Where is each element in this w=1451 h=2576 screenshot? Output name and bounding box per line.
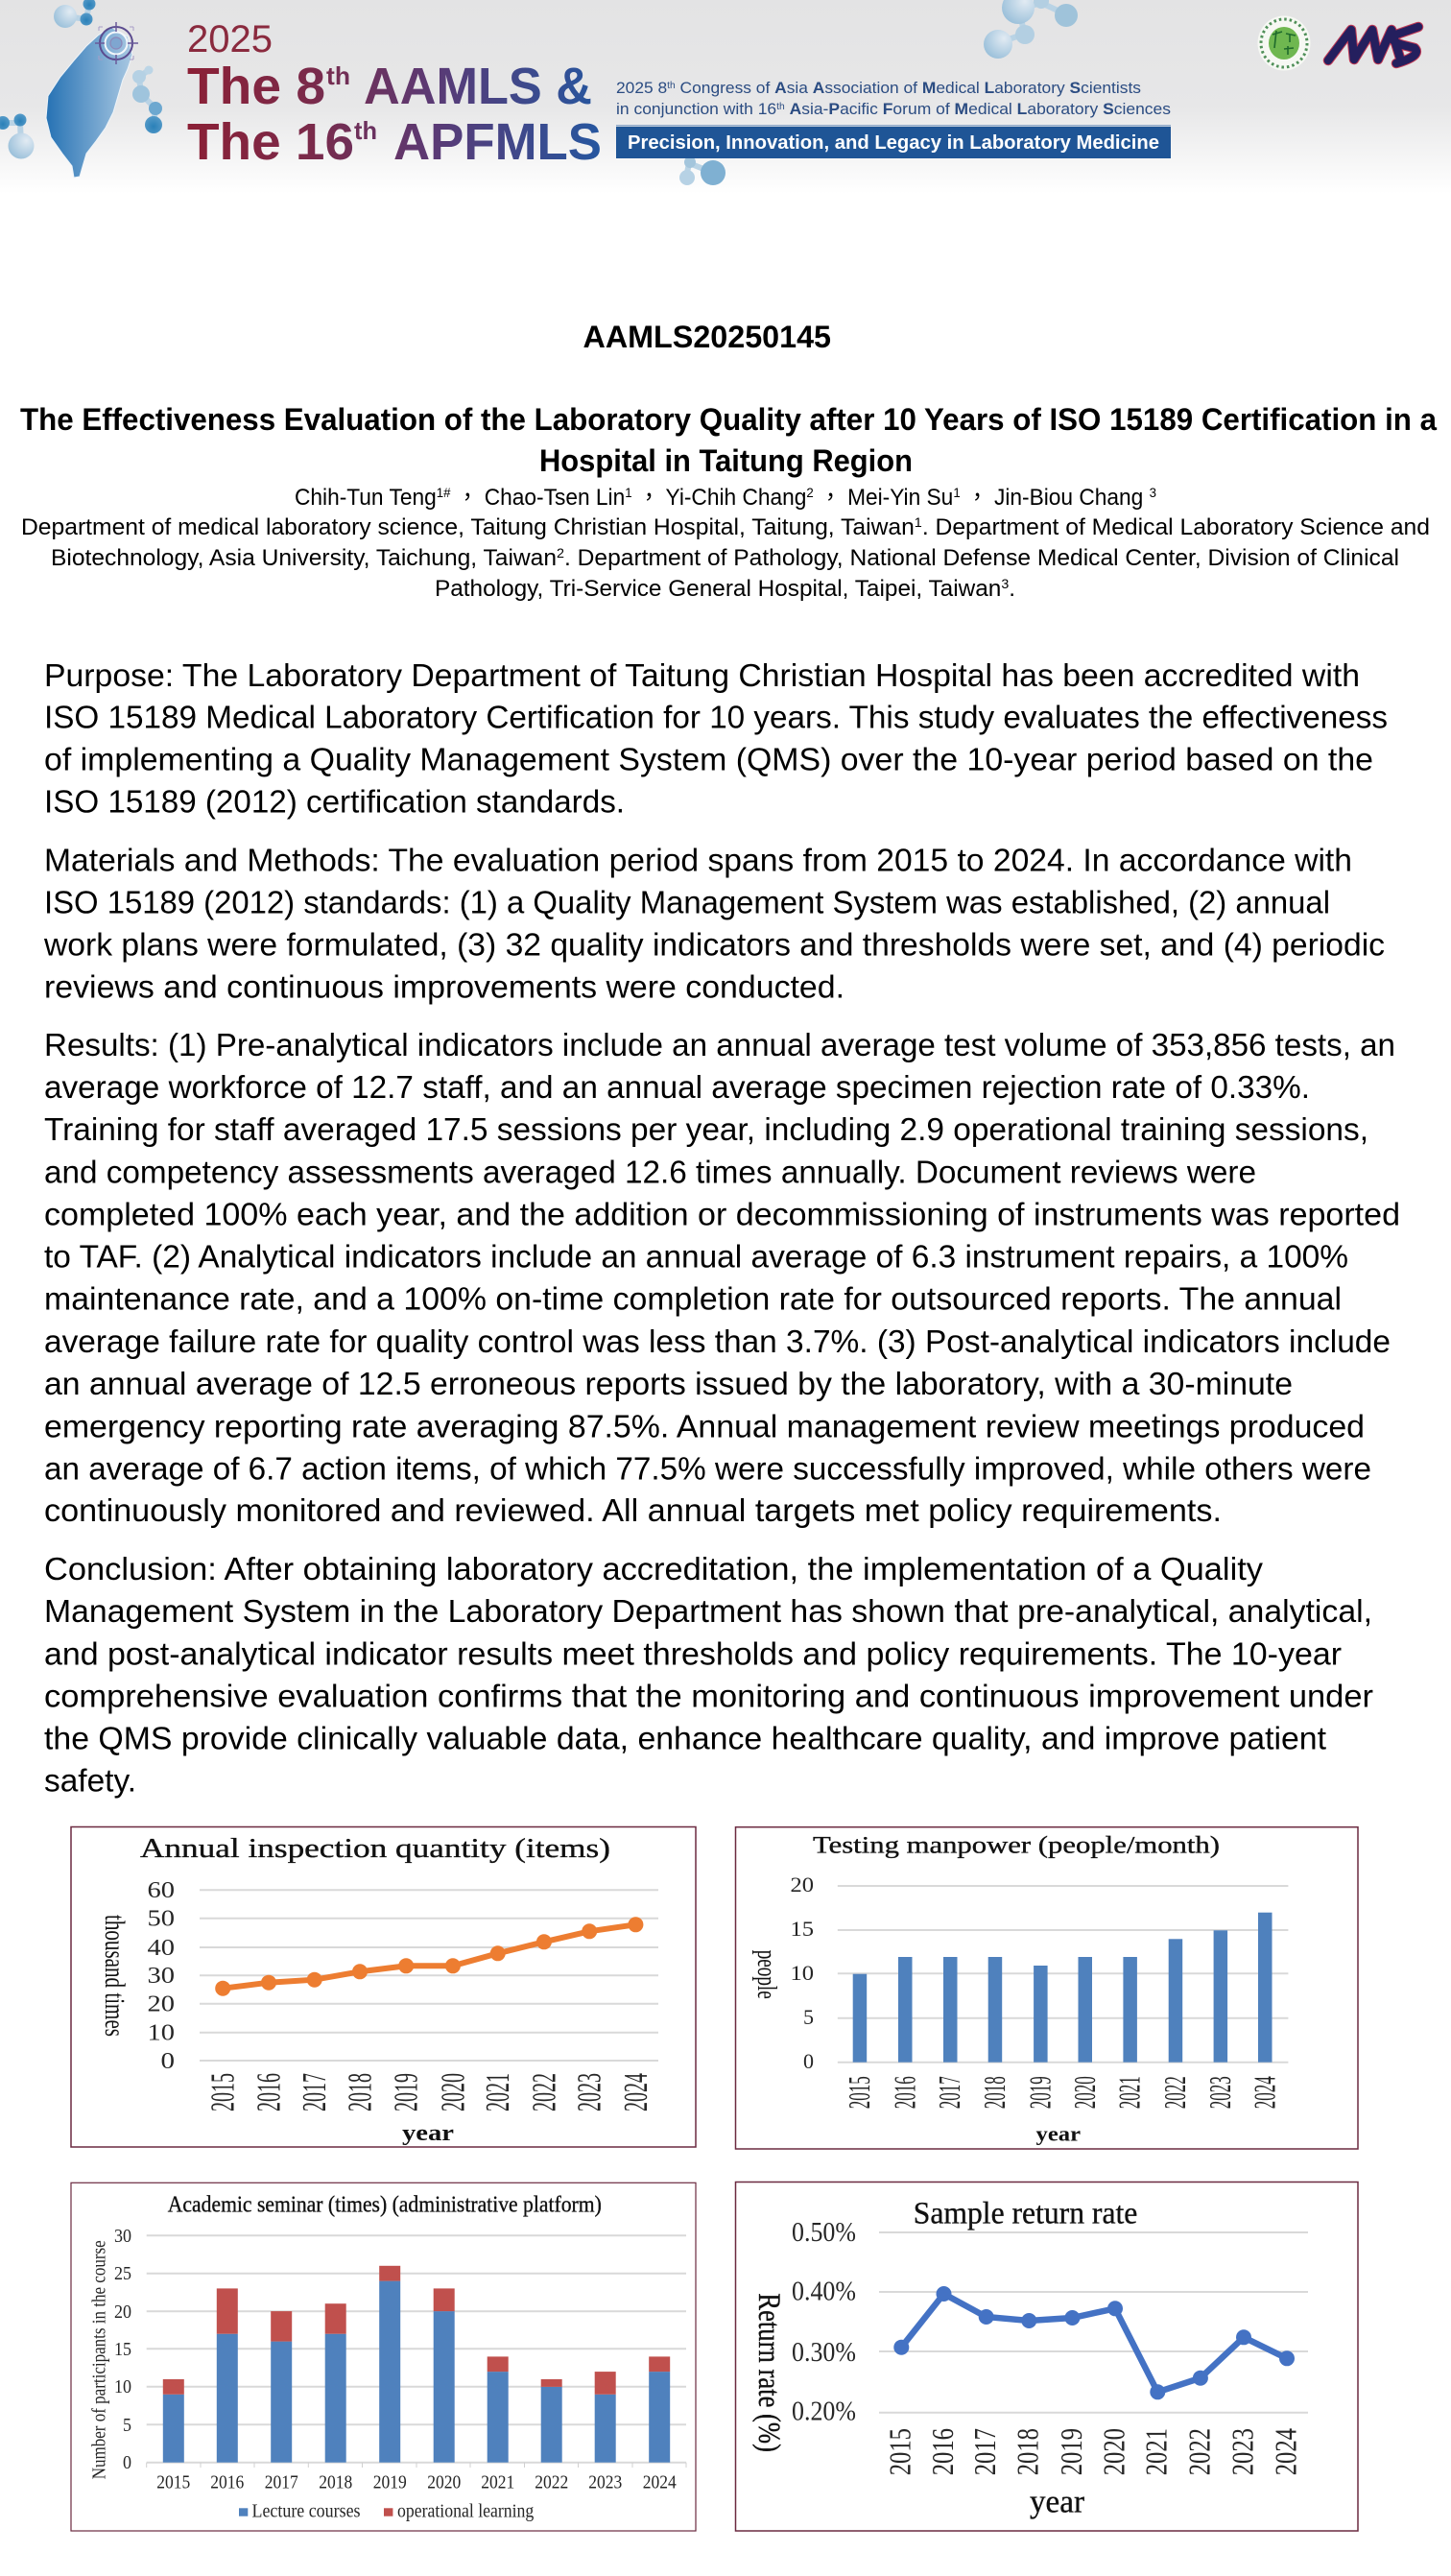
y axis labels: 0 (803, 2049, 814, 2073)
x axis labels (842, 2076, 1281, 2109)
header banner (0, 0, 1451, 194)
x axis labels: 2023 (588, 2472, 622, 2493)
x axis labels: 2018 (1011, 2428, 1045, 2475)
x axis labels: 2020 (434, 2073, 471, 2111)
congress line 2: in conjunction with 16 (616, 100, 773, 118)
x axis labels: 2019 (388, 2073, 425, 2111)
x axis labels: 2023 (1202, 2076, 1237, 2109)
text block: results: average failure rate for quality control was less than 3.7%. (3) Post-analytical indicators include (44, 1324, 1391, 1359)
chart title: Annual inspection quantity (items) (140, 1833, 610, 1864)
x axis title: year (402, 2121, 454, 2146)
authors: ， Mei-Yin Su (814, 485, 953, 511)
text block: conclusion (44, 1551, 1373, 1799)
legend (239, 2501, 534, 2522)
text block: conclusion: Management System in the Laboratory Department has shown that pre-analytical, analytical, (44, 1593, 1372, 1629)
slogan bar (616, 125, 1171, 158)
x axis labels: 2021 (1112, 2076, 1147, 2109)
y axis labels (114, 2226, 131, 2473)
text block: conclusion: safety. (44, 1762, 136, 1799)
text block: conclusion: Conclusion: After obtaining laboratory accreditation, the implementation of a Quality (44, 1551, 1264, 1586)
y axis labels: 0.20% (792, 2397, 856, 2427)
y axis labels: 40 (148, 1936, 175, 1961)
x axis labels: 2022 (525, 2073, 562, 2111)
congress line 2: th (776, 102, 785, 112)
authors: ， Yi-Chih Chang (632, 485, 806, 511)
y axis labels (148, 1878, 175, 2074)
text block: purpose: Purpose: The Laboratory Department of Taitung Christian Hospital has been accredited with (44, 657, 1360, 693)
congress line 2: Asia-Pacific Forum of Medical Laboratory Sciences (790, 100, 1169, 118)
text block: results: emergency reporting rate averaging 87.5%. Annual management review meetings produced (44, 1409, 1365, 1443)
y axis labels: 0.40% (792, 2277, 856, 2307)
y axis labels: 0 (123, 2452, 131, 2473)
x axis labels: 2021 (1139, 2428, 1174, 2475)
heading: The 8th AAMLS &: AAMLS & (364, 58, 592, 115)
icon: molecules (0, 0, 1078, 185)
text block: results: continuously monitored and reviewed. All annual targets met policy requirements. (44, 1492, 1222, 1528)
text block: results: an annual average of 12.5 erroneous reports issued by the laboratory, with a 30-minute (44, 1366, 1293, 1401)
x axis labels: 2019 (1022, 2076, 1057, 2109)
y axis labels: 10 (791, 1961, 814, 1985)
authors: 3 (1150, 485, 1156, 500)
heading: The 16th APFMLS: APFMLS (393, 113, 602, 171)
x axis labels: 2021 (481, 2472, 514, 2493)
x axis labels: 2020 (1096, 2428, 1130, 2475)
y axis labels: 30 (114, 2226, 131, 2247)
text block: results: maintenance rate, and a 100% on-time completion rate for outsourced reports. The annual (44, 1280, 1342, 1317)
text block: results: Results: (1) Pre-analytical indicators include an annual average test volume of 353,856 tests, an (44, 1027, 1395, 1062)
x axis labels: 2017 (296, 2073, 333, 2111)
x axis labels: 2022 (1181, 2428, 1216, 2475)
y axis title: thousand times (99, 1915, 131, 2037)
authors: ， Jin-Biou Chang (961, 485, 1150, 511)
x axis labels: 2022 (535, 2472, 568, 2493)
x axis labels: 2019 (1054, 2428, 1088, 2475)
panel: testing manpower bar chart (735, 1827, 1358, 2149)
affiliations: Department of medical laboratory science, Taitung Christian Hospital, Taitung, Taiwan (21, 514, 891, 540)
y axis labels: 30 (148, 1964, 175, 1989)
text block: materials and methods: Materials and Methods: The evaluation period spans from 2015 to 2024. In accordance with (44, 843, 1352, 877)
slogan bar: Precision, Innovation, and Legacy in Laboratory Medicine (628, 132, 1159, 154)
text block: purpose: ISO 15189 (2012) certification standards. (44, 783, 625, 820)
x axis labels (883, 2428, 1302, 2475)
y axis labels: 20 (791, 1872, 814, 1896)
bars (853, 1913, 1273, 2063)
x axis labels: 2024 (617, 2073, 654, 2111)
x axis labels: 2017 (265, 2472, 298, 2493)
x axis labels: 2021 (479, 2073, 516, 2111)
x axis labels: 2016 (887, 2076, 921, 2109)
y axis labels: 20 (114, 2302, 131, 2323)
congress line 1: Asia Association of Medical Laboratory Scientists (774, 79, 1140, 97)
authors: ， Chao-Tsen Lin (450, 485, 625, 511)
authors: 1 (625, 485, 632, 500)
icon: target on Taipei (95, 22, 138, 64)
x axis labels: 2020 (427, 2472, 461, 2493)
x axis labels: 2015 (204, 2073, 242, 2111)
y axis labels: 20 (148, 1992, 175, 2017)
x axis labels: 2022 (1157, 2076, 1192, 2109)
text block: materials and methods: ISO 15189 (2012) standards: (1) a Quality Management System was established, (2) annual (44, 885, 1330, 919)
text block: materials and methods (43, 843, 1385, 1004)
x axis labels: 2023 (1225, 2428, 1259, 2475)
x axis title: year (1036, 2122, 1081, 2146)
affiliations: 2 (557, 545, 564, 561)
text block: materials and methods: reviews and continuous improvements were conducted. (44, 969, 844, 1004)
x axis labels: 2024 (1268, 2428, 1302, 2475)
y axis labels: 25 (114, 2263, 131, 2284)
affiliations: . (1009, 576, 1015, 602)
heading: The 8th AAMLS &: th (326, 61, 350, 90)
x axis labels: 2020 (1067, 2076, 1102, 2109)
legend: operational learning (397, 2501, 534, 2522)
x axis labels: 2015 (842, 2076, 876, 2109)
legend: Lecture courses (251, 2501, 361, 2522)
y axis labels: 10 (148, 2021, 175, 2046)
text block: conclusion: comprehensive evaluation confirms that the monitoring and continuous improvement under (44, 1678, 1373, 1714)
congress line 1: th (667, 81, 676, 91)
x axis labels: 2015 (156, 2472, 190, 2493)
affiliations: Pathology, Tri-Service General Hospital, Taipei, Taiwan (435, 576, 993, 602)
x axis labels (156, 2472, 677, 2493)
chart title: Sample return rate (914, 2197, 1137, 2231)
y axis labels: 50 (148, 1906, 175, 1931)
affiliations: Biotechnology, Asia University, Taichung, Taiwan (51, 545, 545, 571)
y axis labels (791, 1872, 814, 2073)
x axis labels: 2019 (373, 2472, 407, 2493)
abstract id: AAMLS20250145 (583, 320, 831, 354)
x axis labels: 2018 (342, 2073, 378, 2111)
text block: results: Training for staff averaged 17.5 sessions per year, including 2.9 operational training sessions, (44, 1111, 1368, 1147)
affiliations: 1 (915, 514, 922, 530)
x axis labels: 2017 (932, 2076, 966, 2109)
y axis labels: 0.50% (792, 2217, 856, 2248)
y axis labels: 5 (123, 2415, 131, 2436)
x axis labels: 2017 (967, 2428, 1002, 2475)
heading: The 8th AAMLS & (187, 58, 592, 115)
text block: conclusion: and post-analytical indicator results meet thresholds and policy requirements. The 10-year (44, 1635, 1342, 1672)
text block: results: completed 100% each year, and the addition or decommissioning of instruments was reported (44, 1196, 1400, 1232)
text block: purpose: of implementing a Quality Management System (QMS) over the 10-year period based on the (44, 741, 1373, 777)
text block: purpose (44, 657, 1388, 820)
x axis labels: 2016 (250, 2073, 288, 2111)
panel: annual inspection quantity line chart (71, 1827, 696, 2147)
paper title: Hospital in Taitung Region (539, 443, 913, 478)
y axis title: Number of participants in the course (89, 2240, 110, 2479)
x axis labels: 2023 (571, 2073, 608, 2111)
chart title: Testing manpower (people/month) (813, 1833, 1220, 1859)
icon: round society logo (1257, 15, 1311, 71)
y axis labels: 10 (114, 2376, 131, 2397)
affiliations: . Department of Medical Laboratory Science and (922, 514, 1430, 540)
icon: Taiwan map (46, 27, 132, 178)
x axis labels: 2016 (925, 2428, 960, 2475)
x axis labels: 2016 (210, 2472, 244, 2493)
x axis labels: 2024 (1247, 2076, 1281, 2109)
congress line 1: 2025 8 (616, 79, 666, 97)
y axis labels: 0 (161, 2049, 175, 2074)
panel: academic seminar stacked bar chart (71, 2182, 696, 2531)
y axis title: people (751, 1950, 781, 1999)
text block: results: an average of 6.7 action items, of which 77.5% were successfully improved, while others were (44, 1451, 1371, 1486)
text block: materials and methods: work plans were formulated, (3) 32 quality indicators and thresholds were set, and (4) periodic (43, 927, 1385, 962)
affiliations (21, 514, 1430, 602)
heading: The 16th APFMLS: The 16 (187, 113, 354, 171)
panel: sample return rate line chart (735, 2182, 1358, 2531)
x axis labels: 2015 (883, 2428, 917, 2475)
chart title: Academic seminar (times) (administrative platform) (168, 2192, 602, 2217)
heading: The 16th APFMLS (187, 113, 602, 171)
affiliations: 3 (1001, 576, 1009, 591)
text block: results: and competency assessments averaged 12.6 times annually. Document reviews were (44, 1154, 1256, 1190)
x axis labels: 2018 (319, 2472, 352, 2493)
x axis title: year (1030, 2484, 1085, 2519)
heading: The 8th AAMLS &: The 8 (187, 58, 325, 115)
paper title (20, 402, 1437, 478)
x axis labels: 2018 (977, 2076, 1011, 2109)
authors: 1 (953, 485, 961, 500)
y axis labels: 5 (803, 2005, 814, 2029)
y axis title: Return rate (%) (751, 2293, 786, 2452)
x axis labels (204, 2073, 654, 2111)
series: lecture courses (163, 2281, 670, 2463)
text block: conclusion: the QMS provide clinically valuable data, enhance healthcare quality, and improve patient (44, 1720, 1326, 1756)
text block: results (44, 1027, 1400, 1528)
y axis labels: 15 (791, 1917, 814, 1941)
line series (893, 2286, 1295, 2399)
icon: MMS logo (1328, 27, 1418, 63)
authors: 2 (806, 485, 814, 500)
y axis labels: 60 (148, 1878, 175, 1903)
y axis labels: 0.30% (792, 2337, 856, 2368)
line series (215, 1917, 643, 1996)
series: operational learning (163, 2266, 670, 2395)
y axis labels: 15 (114, 2339, 131, 2360)
year 2025: 2025 (187, 18, 273, 60)
y axis labels (792, 2217, 856, 2427)
text block: results: average workforce of 12.7 staff, and an annual average specimen rejection rate of 0.33%. (44, 1069, 1310, 1105)
paper title: The Effectiveness Evaluation of the Laboratory Quality after 10 Years of ISO 15189 Certification in a (20, 402, 1437, 437)
x axis labels: 2024 (643, 2472, 677, 2493)
text block: purpose: ISO 15189 Medical Laboratory Certification for 10 years. This study evaluates the effectiveness (44, 699, 1388, 735)
heading: The 16th APFMLS: th (354, 116, 377, 145)
affiliations: . Department of Pathology, National Defense Medical Center, Division of Clinical (564, 545, 1399, 571)
text block: results: to TAF. (2) Analytical indicators include an annual average of 6.3 instrument repairs, a 100% (44, 1238, 1348, 1275)
congress line 1: Congress of (676, 79, 774, 97)
authors: 1# (437, 485, 451, 500)
authors: Chih-Tun Teng (295, 485, 444, 511)
